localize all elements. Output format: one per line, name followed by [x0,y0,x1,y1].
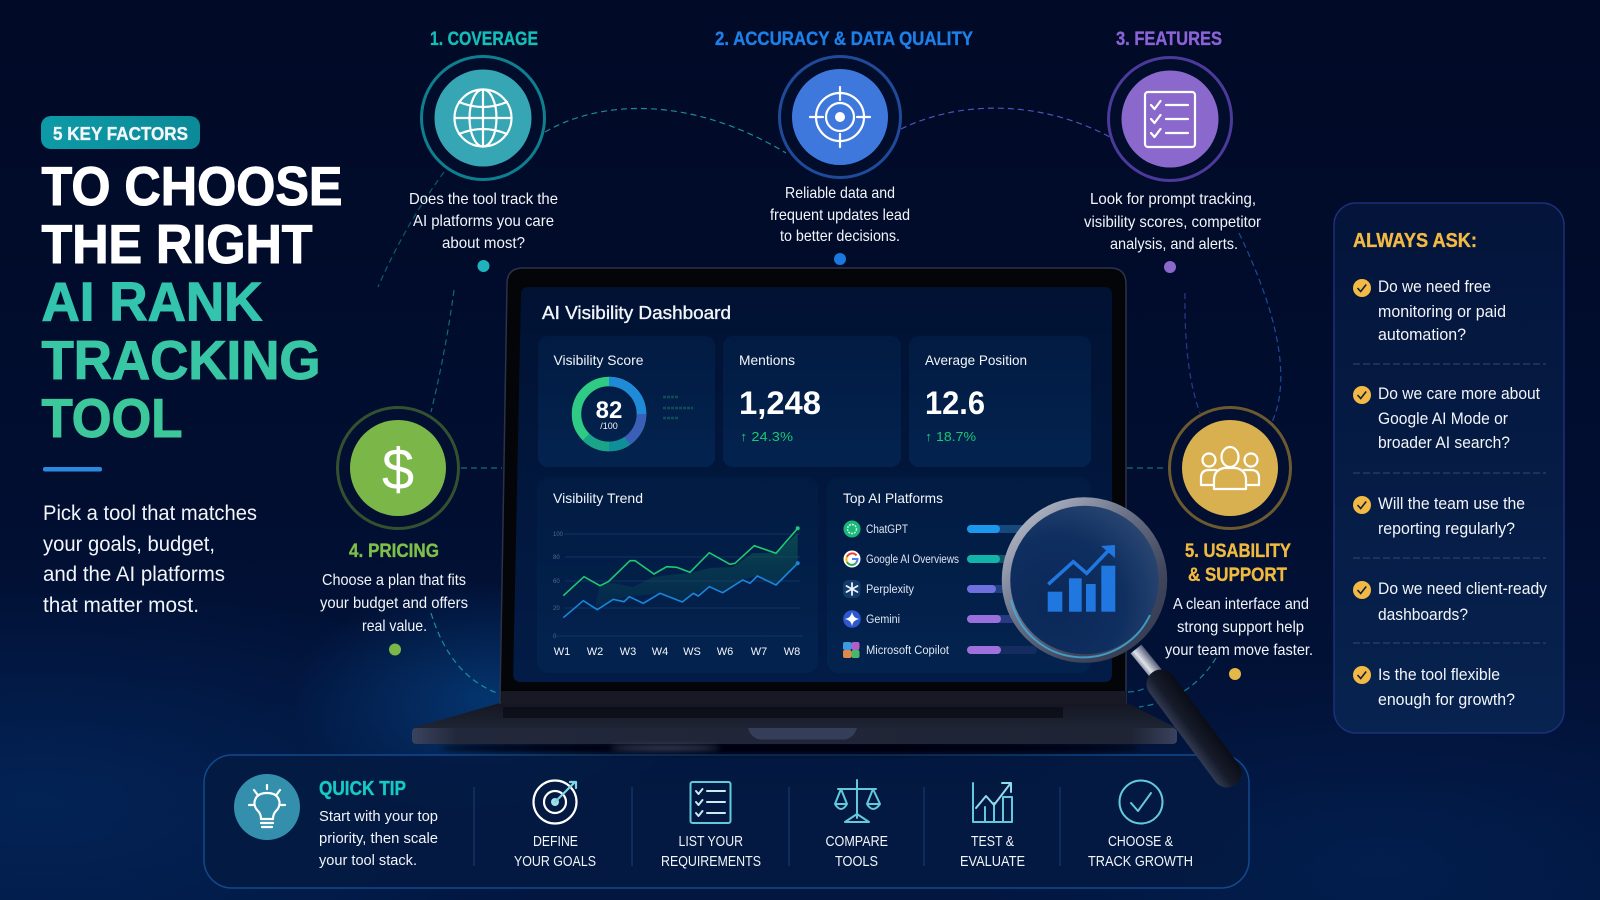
card: average position [909,336,1091,467]
heading: 4. PRICING [349,541,439,562]
description: your team move faster. [1165,642,1313,659]
quick tip heading: QUICK TIP [319,778,406,800]
question 1: automation? [1378,325,1466,344]
line chart: W7 [751,646,767,658]
quick tip text: priority, then scale [319,830,438,847]
title: TRACKING [42,329,320,391]
line chart [553,526,803,658]
factor 5: usability and support [1165,408,1313,680]
lens [1006,502,1163,658]
icon: checklist [1108,58,1232,180]
panel heading: ALWAYS ASK: [1353,230,1477,252]
icon: globe [422,56,544,180]
line chart: W8 [784,646,800,658]
description: visibility scores, competitor [1084,214,1262,231]
row: Gemini [843,610,1027,628]
question 3: Will the team use the [1378,494,1525,513]
handle [1136,649,1227,773]
label: CHOOSE & [1108,833,1173,850]
title: THE RIGHT [42,213,312,275]
description: to better decisions. [780,228,900,245]
label: DEFINE [533,833,578,850]
dividers [474,787,1060,866]
laptop hinge [501,691,1126,704]
description: your budget and offers [320,595,468,612]
line chart: 20 [553,606,560,612]
description [770,185,910,245]
description [409,191,558,252]
description: frequent updates lead [770,207,910,224]
card: average position: ↑ 18.7% [925,429,976,444]
label: EVALUATE [960,853,1025,870]
row: Perplexity: Perplexity [866,584,914,596]
icon: light bulb [234,774,300,840]
question 2: broader AI search? [1378,433,1510,452]
question 2: Google AI Mode or [1378,409,1508,428]
quick tip text: your tool stack. [319,852,417,869]
label: TRACK GROWTH [1088,853,1193,870]
label: LIST YOUR [678,833,743,850]
card: mentions [723,336,901,467]
question 4: dashboards? [1378,605,1468,624]
question 3: reporting regularly? [1378,519,1515,538]
label [960,833,1025,870]
title: AI RANK [42,270,263,332]
intro text: and the AI platforms [43,562,225,586]
description: strong support help [1177,619,1304,636]
factor 3: features [1084,29,1262,273]
heading: 5. USABILITY [1185,541,1291,562]
factor 1: coverage [409,29,558,272]
description [1165,596,1313,659]
heading: 1. COVERAGE [430,29,538,50]
icon: target [780,56,900,178]
heading: 2. ACCURACY & DATA QUALITY [715,29,973,50]
accent bar [43,467,102,472]
line chart: W4 [652,646,668,658]
label: REQUIREMENTS [661,853,761,870]
label: YOUR GOALS [514,853,596,870]
question 1: Do we need free [1378,277,1491,296]
label [661,833,761,870]
marker dot [834,253,846,265]
icon: growth chart [973,783,1012,822]
factor 4: pricing [320,408,468,656]
panel: quick tip and steps [204,755,1249,888]
pill: 5 key factors [41,116,200,149]
row: Gemini: Gemini [866,614,900,626]
dividers [1353,364,1546,643]
description: real value. [362,618,427,635]
line chart: 80 [553,555,560,561]
description: Reliable data and [785,185,895,202]
description: Does the tool track the [409,191,558,208]
label [1088,833,1193,870]
row: Microsoft Copilot [843,642,1037,658]
title: TOOL [42,387,182,449]
pill: 5 key factors: 5 KEY FACTORS [53,124,188,144]
line chart: W2 [587,646,603,658]
label [826,833,888,870]
question 4 [1353,579,1547,624]
card: top AI platforms: Top AI Platforms [843,490,943,506]
intro text: Pick a tool that matches [43,501,257,525]
card: mentions: 1,248 [739,385,821,421]
dashed connectors between factors [378,108,1281,707]
intro text: that matter most. [43,593,199,617]
line chart: W6 [717,646,733,658]
laptop [412,268,1177,754]
step: test and evaluate [960,783,1025,870]
card: visibility score: 82 [596,397,622,424]
step: choose and track growth [1088,780,1193,870]
donut chart [576,382,642,447]
description: Look for prompt tracking, [1090,191,1256,208]
question 5: Is the tool flexible [1378,665,1500,684]
dashboard screen [513,287,1112,682]
line chart: W1 [554,646,570,658]
row: Perplexity [843,580,1027,598]
quick tip text [319,808,438,869]
question 5 [1353,665,1515,709]
row: ChatGPT: ChatGPT [866,524,908,536]
card: mentions: ↑ 24.3% [740,429,793,444]
question 2 [1353,384,1540,452]
card: average position: 12.6 [925,385,985,421]
icon: list [690,782,730,823]
icon: scales [835,780,880,822]
question 1 [1353,277,1506,344]
quick tip text: Start with your top [319,808,438,825]
row: ChatGPT [844,520,1057,538]
icon: check circle [1120,780,1162,824]
step: compare tools [826,780,888,870]
step: list your requirements [661,782,761,870]
question 3 [1353,494,1525,538]
row: Google AI Overviews: Google AI Overviews [866,554,959,566]
description: Choose a plan that fits [322,572,466,589]
line chart: 0 [553,634,557,640]
row: Google AI Overviews [844,550,1037,568]
card: visibility trend: Visibility Trend [553,490,643,506]
description [320,572,468,635]
heading: & SUPPORT [1188,565,1287,586]
marker dot [389,644,401,656]
description: about most? [442,235,525,252]
line chart: 100 [553,532,564,538]
line chart: W3 [620,646,636,658]
laptop base [412,703,1177,754]
label: TOOLS [835,853,878,870]
line chart: 60 [553,579,560,585]
heading [1185,541,1291,586]
card: average position: Average Position [925,352,1027,368]
intro text: your goals, budget, [43,532,215,556]
panel: always ask [1334,203,1564,733]
icon: dollar [338,408,458,528]
description: A clean interface and [1173,596,1309,613]
question 1: monitoring or paid [1378,302,1506,321]
question 4: Do we need client-ready [1378,579,1547,598]
marker dot [1164,261,1176,273]
laptop lid [500,268,1126,703]
intro text [43,501,257,617]
icon: goal target [534,780,576,824]
title: TO CHOOSE [42,155,342,217]
label: COMPARE [826,833,888,850]
card: visibility score: /100 [600,421,618,431]
question 2: Do we care more about [1378,384,1540,403]
label [514,833,596,870]
description [1084,191,1262,253]
factor 2: accuracy and data quality [715,29,973,265]
title [42,155,342,449]
description: analysis, and alerts. [1110,236,1238,253]
description: AI platforms you care [413,213,554,230]
heading: 3. FEATURES [1116,29,1222,50]
card: visibility trend [537,477,818,673]
dashboard title: AI Visibility Dashboard [542,302,731,323]
card: visibility score: Visibility Score [554,352,644,368]
label: TEST & [971,833,1014,850]
card: visibility score [538,336,715,467]
magnifying glass [1006,502,1227,773]
marker dot [478,260,490,272]
icon: people [1170,408,1290,528]
faint legend [663,397,693,418]
step: define your goals [514,780,596,870]
line chart: WS [683,646,701,658]
card: mentions: Mentions [739,352,795,368]
card: top AI platforms [827,477,1091,673]
question 5: enough for growth? [1378,690,1515,709]
icon: dollar: $ [382,437,414,502]
row: Microsoft Copilot: Microsoft Copilot [866,645,950,657]
marker dot [1229,668,1241,680]
icon: bar chart with arrow [1048,545,1115,612]
